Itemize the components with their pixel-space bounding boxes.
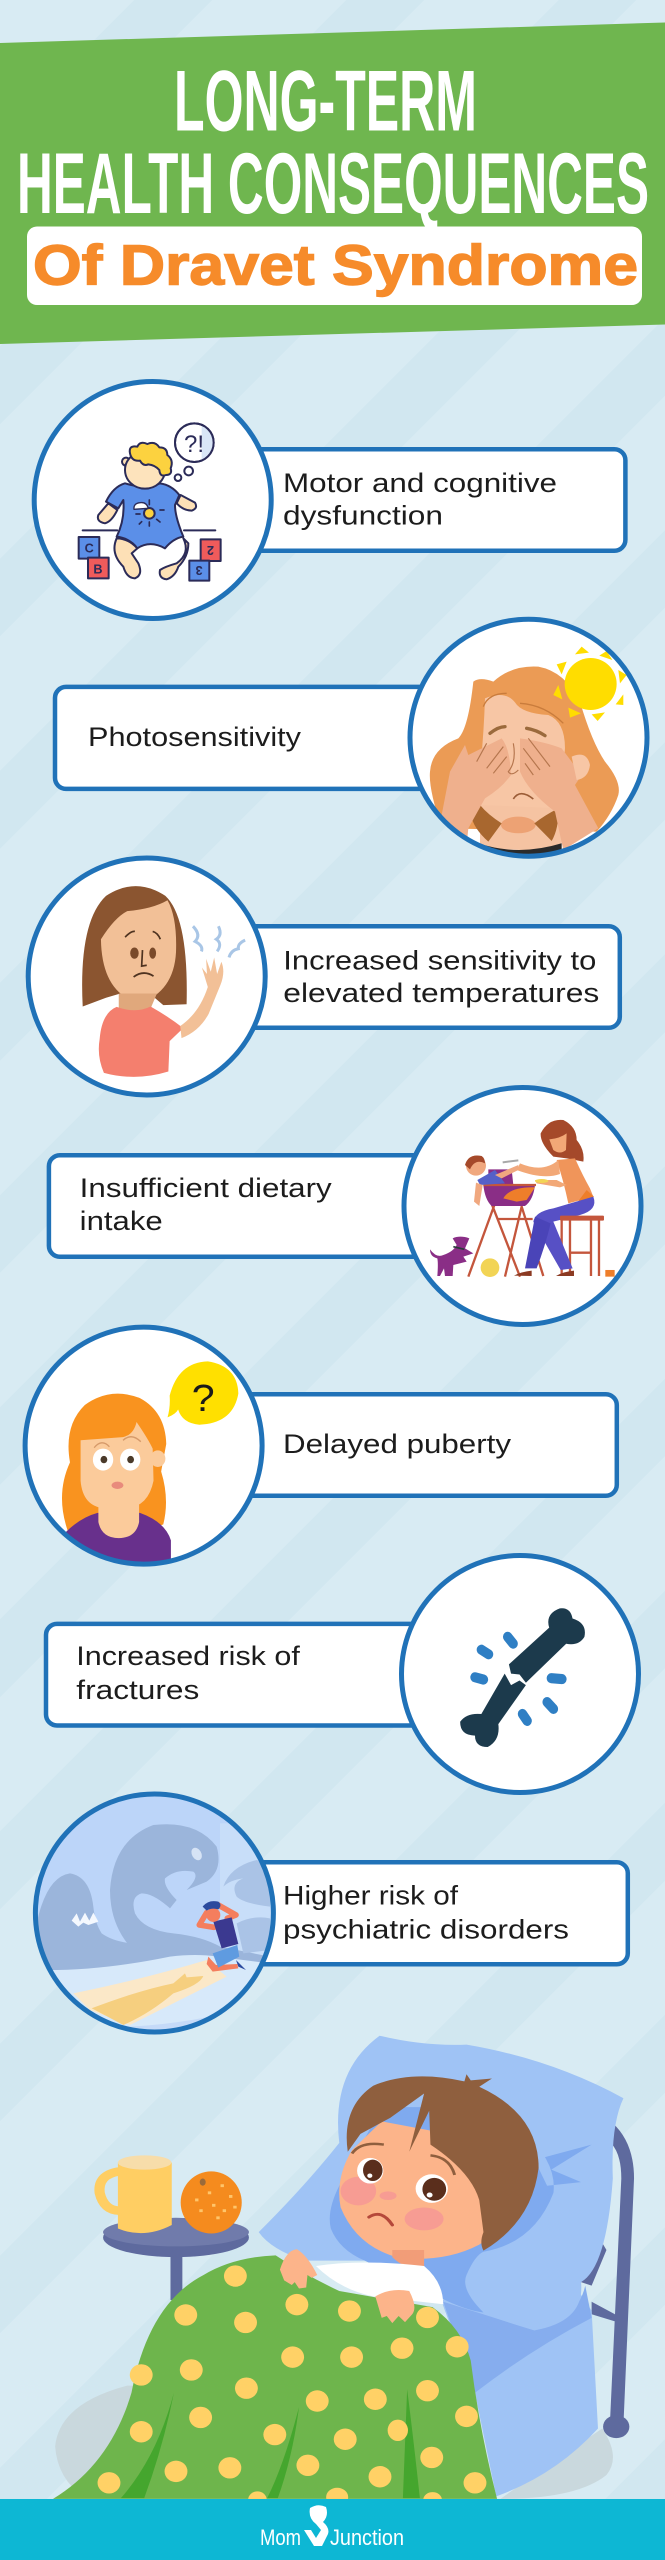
label text: Increased risk of xyxy=(76,1641,300,1671)
banner background xyxy=(0,22,665,344)
illustration: confused girl: ? xyxy=(192,1377,215,1419)
label text: psychiatric disorders xyxy=(283,1914,569,1944)
illustration: woman covering eyes with sun xyxy=(430,647,627,860)
circle ring xyxy=(35,1794,273,2032)
panel: increased risk of fractures xyxy=(46,1556,638,1792)
circle background xyxy=(402,1556,638,1792)
subtitle pill xyxy=(27,226,642,305)
boy hands xyxy=(280,2249,414,2323)
illustration: girl sensing heat xyxy=(82,886,245,1077)
panel: sensitivity to temperatures xyxy=(28,858,620,1095)
label text: Increased sensitivity to xyxy=(283,946,596,976)
circle background xyxy=(34,382,271,618)
label text: Motor and cognitive xyxy=(283,468,557,498)
icon: baby with blocks: ?! xyxy=(184,431,204,458)
label text: dysfunction xyxy=(283,500,443,530)
label box xyxy=(200,449,625,551)
footer background xyxy=(0,2499,665,2560)
label text: Photosensitivity xyxy=(88,722,302,752)
circle ring xyxy=(25,1327,262,1564)
illustration: mother feeding baby xyxy=(430,1120,615,1277)
circle background xyxy=(404,1088,641,1324)
floor shadows xyxy=(55,2386,613,2499)
panel: delayed puberty xyxy=(25,1327,617,1566)
bed frame foot xyxy=(603,2415,629,2438)
logo mark xyxy=(304,2505,328,2546)
panel: motor and cognitive dysfunction xyxy=(34,382,625,618)
label box xyxy=(46,1624,466,1726)
pillow shade xyxy=(330,2107,592,2312)
label text: intake xyxy=(80,1206,163,1236)
logo word Junction: Junction xyxy=(330,2525,404,2550)
side table xyxy=(103,2218,249,2300)
label text: Higher risk of xyxy=(283,1880,459,1910)
illustration: confused girl xyxy=(62,1361,238,1566)
icon: baby with blocks: B xyxy=(93,562,102,576)
label text: Insufficient dietary xyxy=(80,1173,332,1203)
circle background xyxy=(28,858,265,1095)
blanket xyxy=(53,2255,497,2509)
logo word Mom: Mom xyxy=(260,2525,301,2550)
panel: photosensitivity xyxy=(55,619,647,860)
label box xyxy=(200,926,620,1028)
panel: insufficient dietary intake xyxy=(49,1088,641,1324)
illustration: man facing giant waves xyxy=(37,1823,273,2035)
label box xyxy=(200,1862,628,1964)
sheet xyxy=(441,2282,598,2496)
circle ring xyxy=(404,1088,641,1324)
bed frame xyxy=(581,2123,634,2425)
icon: baby with blocks xyxy=(79,423,221,581)
logo xyxy=(260,2505,404,2550)
circle ring xyxy=(402,1556,638,1792)
circle ring xyxy=(28,858,265,1095)
pillow xyxy=(259,2036,623,2330)
orange xyxy=(181,2171,242,2234)
icon: baby with blocks: C xyxy=(85,542,94,556)
label box xyxy=(200,1394,617,1496)
header banner xyxy=(0,22,665,344)
icon: broken bone xyxy=(460,1608,585,1747)
label text: Delayed puberty xyxy=(283,1429,512,1459)
icon: baby with blocks: 3 xyxy=(196,563,203,577)
circle background xyxy=(35,1794,273,2032)
label box xyxy=(55,687,475,789)
illustration: sick boy in bed xyxy=(53,2036,634,2509)
circle ring xyxy=(34,382,271,618)
subtitle: Of Dravet Syndrome xyxy=(33,234,638,298)
mug xyxy=(99,2155,172,2233)
boy head xyxy=(339,2074,539,2269)
icon: baby with blocks: 2 xyxy=(207,543,214,557)
footer bar xyxy=(0,2499,665,2560)
panel: psychiatric disorders xyxy=(35,1794,628,2035)
circle background xyxy=(410,619,647,856)
circle ring xyxy=(410,619,647,856)
label box xyxy=(49,1155,469,1257)
label text: fractures xyxy=(76,1675,199,1705)
circle background xyxy=(25,1327,262,1564)
label text: elevated temperatures xyxy=(283,978,599,1008)
sheet shade xyxy=(443,2286,592,2393)
boy shirt xyxy=(316,2262,443,2304)
